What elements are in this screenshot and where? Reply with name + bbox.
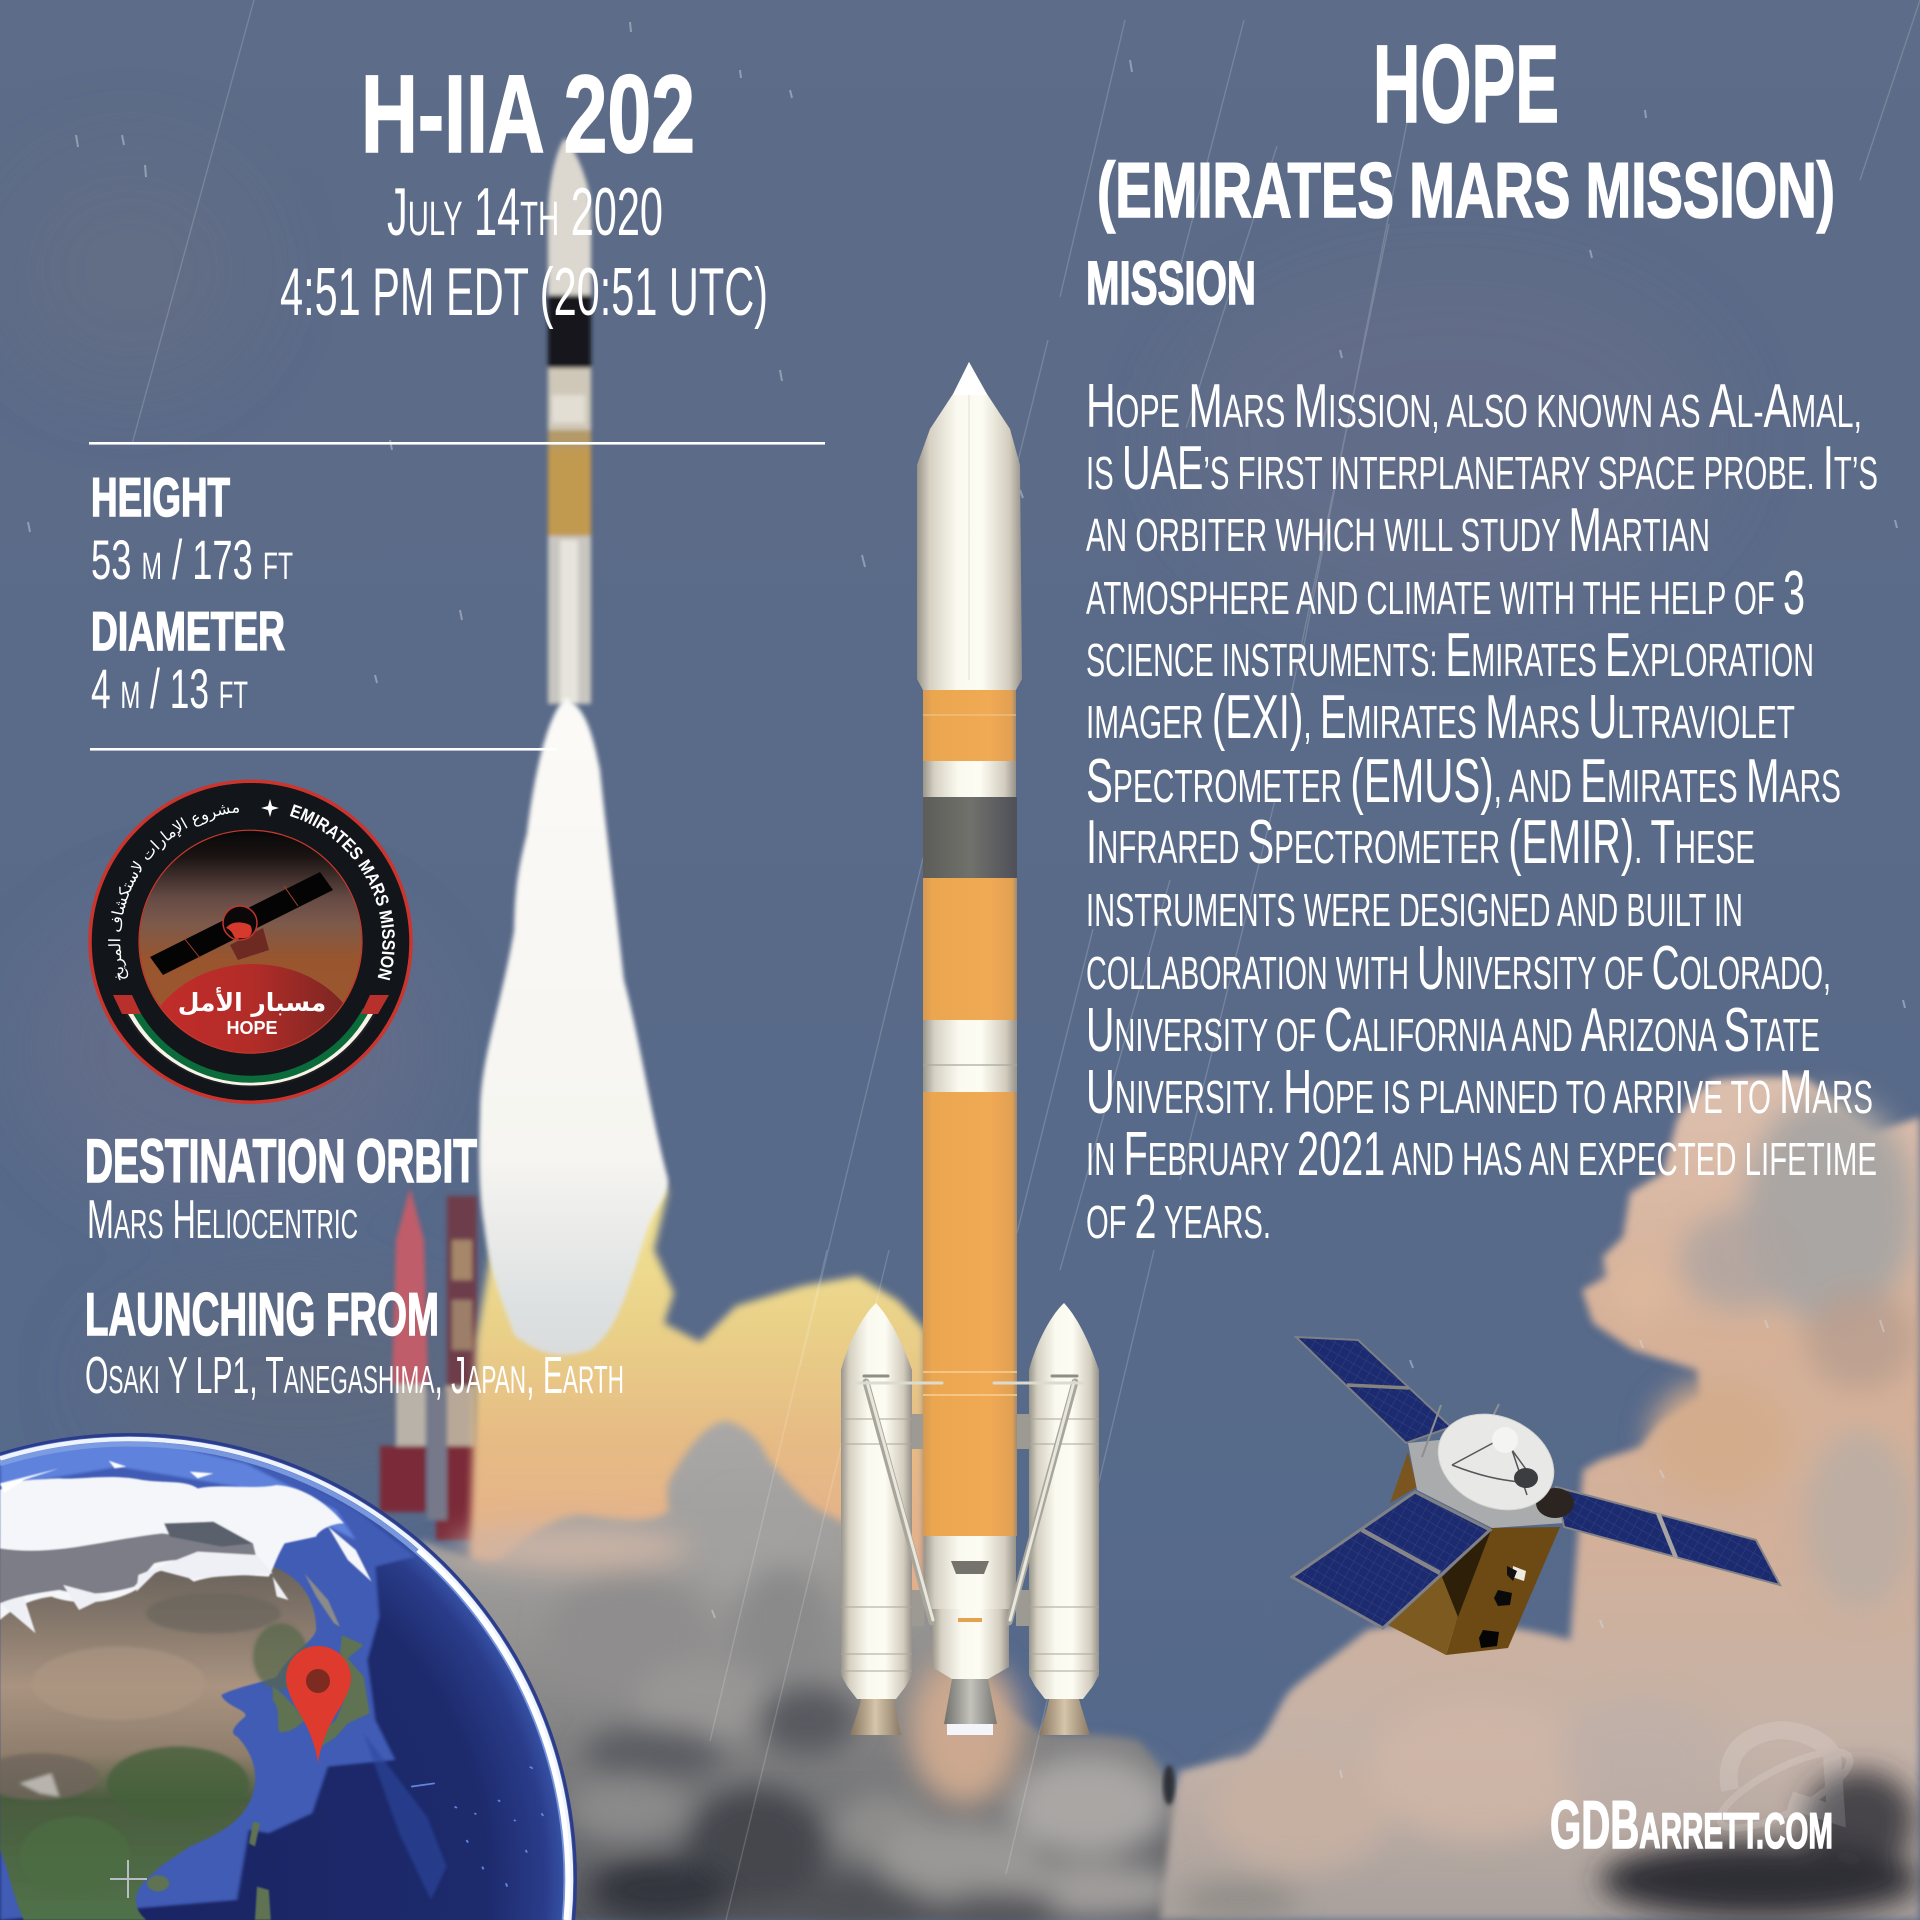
title: H-IIA 202: H-IIA 202: [361, 53, 695, 176]
solar panel right: [1556, 1487, 1780, 1585]
mission description text: SCIENCE INSTRUMENTS: EMIRATES EXPLORATION: [1086, 621, 1814, 690]
smoke puffs: [450, 1499, 1188, 1920]
left booster: [841, 1303, 912, 1735]
satellite body side panels: [1382, 1452, 1560, 1655]
badge disc outline: [139, 830, 362, 1053]
mission description text: SPECTROMETER (EMUS), AND EMIRATES MARS: [1086, 747, 1841, 816]
mission description text: INFRARED SPECTROMETER (EMIR). THESE: [1086, 808, 1755, 877]
mission description text: IMAGER (EXI), EMIRATES MARS ULTRAVIOLET: [1086, 683, 1795, 752]
core stage upper orange: [923, 878, 1017, 1020]
booster struts: [853, 1376, 1085, 1622]
core stage band white: [923, 1020, 1017, 1092]
globe rim glow: [0, 1435, 575, 1920]
solar panel lower left: [1292, 1492, 1490, 1628]
payload fairing: [917, 362, 1022, 690]
satellite body details: [1479, 1566, 1526, 1648]
interstage dark band: [923, 797, 1017, 878]
dish shadow: [1536, 1488, 1574, 1518]
crosshair: [110, 1860, 147, 1898]
engine section: [924, 1536, 1016, 1735]
stat: destination orbit: MARS HELIOCENTRIC: [87, 1188, 358, 1250]
stat: launching from: OSAKI Y LP1, TANEGASHIMA, JAPAN, EARTH: [85, 1347, 624, 1405]
badge curved English text: EMIRATES MARS MISSION: [290, 804, 395, 980]
badge curved Arabic text: مشروع الإمارات لاستكشاف المريخ: [108, 805, 239, 980]
rising rocket in photo: [548, 138, 591, 704]
satellite deck: [1408, 1440, 1564, 1528]
launch time: 4:51 PM EDT (20:51 UTC): [280, 254, 768, 330]
stat: destination orbit: DESTINATION ORBIT: [85, 1127, 477, 1195]
ocean island specks: [411, 1767, 543, 1887]
cloud tonal patches: [1180, 1095, 1920, 1918]
watermark logo: [1711, 1730, 1859, 1842]
mission description text: OF 2 YEARS.: [1086, 1183, 1271, 1252]
divider bottom: [90, 748, 557, 751]
heading: mission: MISSION: [1086, 249, 1256, 317]
stat: diameter: [91, 600, 285, 720]
badge ring: [90, 781, 411, 1102]
high gain dish antenna: [1423, 1396, 1569, 1528]
exhaust flame plume: [479, 698, 668, 1355]
launch towers: [380, 1188, 478, 1540]
Siberian snow: [0, 1461, 372, 1633]
core stage lower orange: [923, 1092, 1017, 1536]
shallow seas: [0, 1437, 447, 1920]
mission description text: HOPE MARS MISSION, ALSO KNOWN AS AL-AMAL,: [1086, 372, 1862, 441]
badge HOPE: HOPE: [226, 1018, 278, 1038]
land colour patches: [0, 1594, 310, 1834]
stat: height: HEIGHT: [91, 466, 230, 528]
faint clouds in sky: [0, 150, 1720, 1470]
stat: destination orbit: [85, 1127, 477, 1250]
peach cloud, right: [1160, 1077, 1920, 1920]
stat: diameter: 4 M / 13 FT: [91, 657, 248, 720]
badge flag arc: [113, 995, 389, 1084]
badge disc: Mars scene: [140, 831, 362, 1053]
mission description text: AN ORBITER WHICH WILL STUDY MARTIAN: [1086, 496, 1710, 565]
booster attachment brackets: [912, 1414, 1029, 1626]
second stage orange: [923, 690, 1016, 761]
grey smoke cloud: [420, 1421, 1200, 1920]
right booster: [1029, 1303, 1099, 1735]
land: [0, 1543, 316, 1920]
globe surface: [0, 1433, 577, 1920]
mission description text: COLLABORATION WITH UNIVERSITY OF COLORADO,: [1086, 934, 1831, 1003]
badge Arabic name: مسبار الأمل: [178, 987, 326, 1017]
globe with launch site: [0, 1433, 577, 1920]
mission patch badge: [88, 780, 413, 1104]
upper stage adapter: [923, 761, 1016, 797]
divider top: [89, 442, 825, 445]
stat: height: 53 M / 173 FT: [91, 528, 293, 591]
satellite: Hope probe: [1292, 1337, 1780, 1655]
antenna mast: [1422, 1404, 1499, 1457]
solar panel upper left: [1296, 1337, 1451, 1443]
mission title: HOPE: HOPE: [1373, 23, 1559, 146]
stat: launching from: LAUNCHING FROM: [85, 1281, 439, 1348]
stat: launching from: [85, 1281, 624, 1405]
stat: height: [91, 466, 293, 591]
stat: diameter: DIAMETER: [91, 600, 285, 662]
icon: location pin: [286, 1646, 351, 1763]
exhaust fire glow: [470, 1170, 925, 1660]
launch date: JULY 14TH 2020: [387, 174, 663, 250]
Korea, Japan, Sakhalin, Taiwan: [147, 1573, 370, 1920]
badge star: [261, 799, 279, 817]
mission description text: UNIVERSITY OF CALIFORNIA AND ARIZONA STATE: [1086, 996, 1820, 1065]
rocket illustration: H-IIA 202: [841, 362, 1099, 1735]
mission description text: [1086, 372, 1878, 1252]
peach glow under rocket: [910, 1655, 1020, 1805]
